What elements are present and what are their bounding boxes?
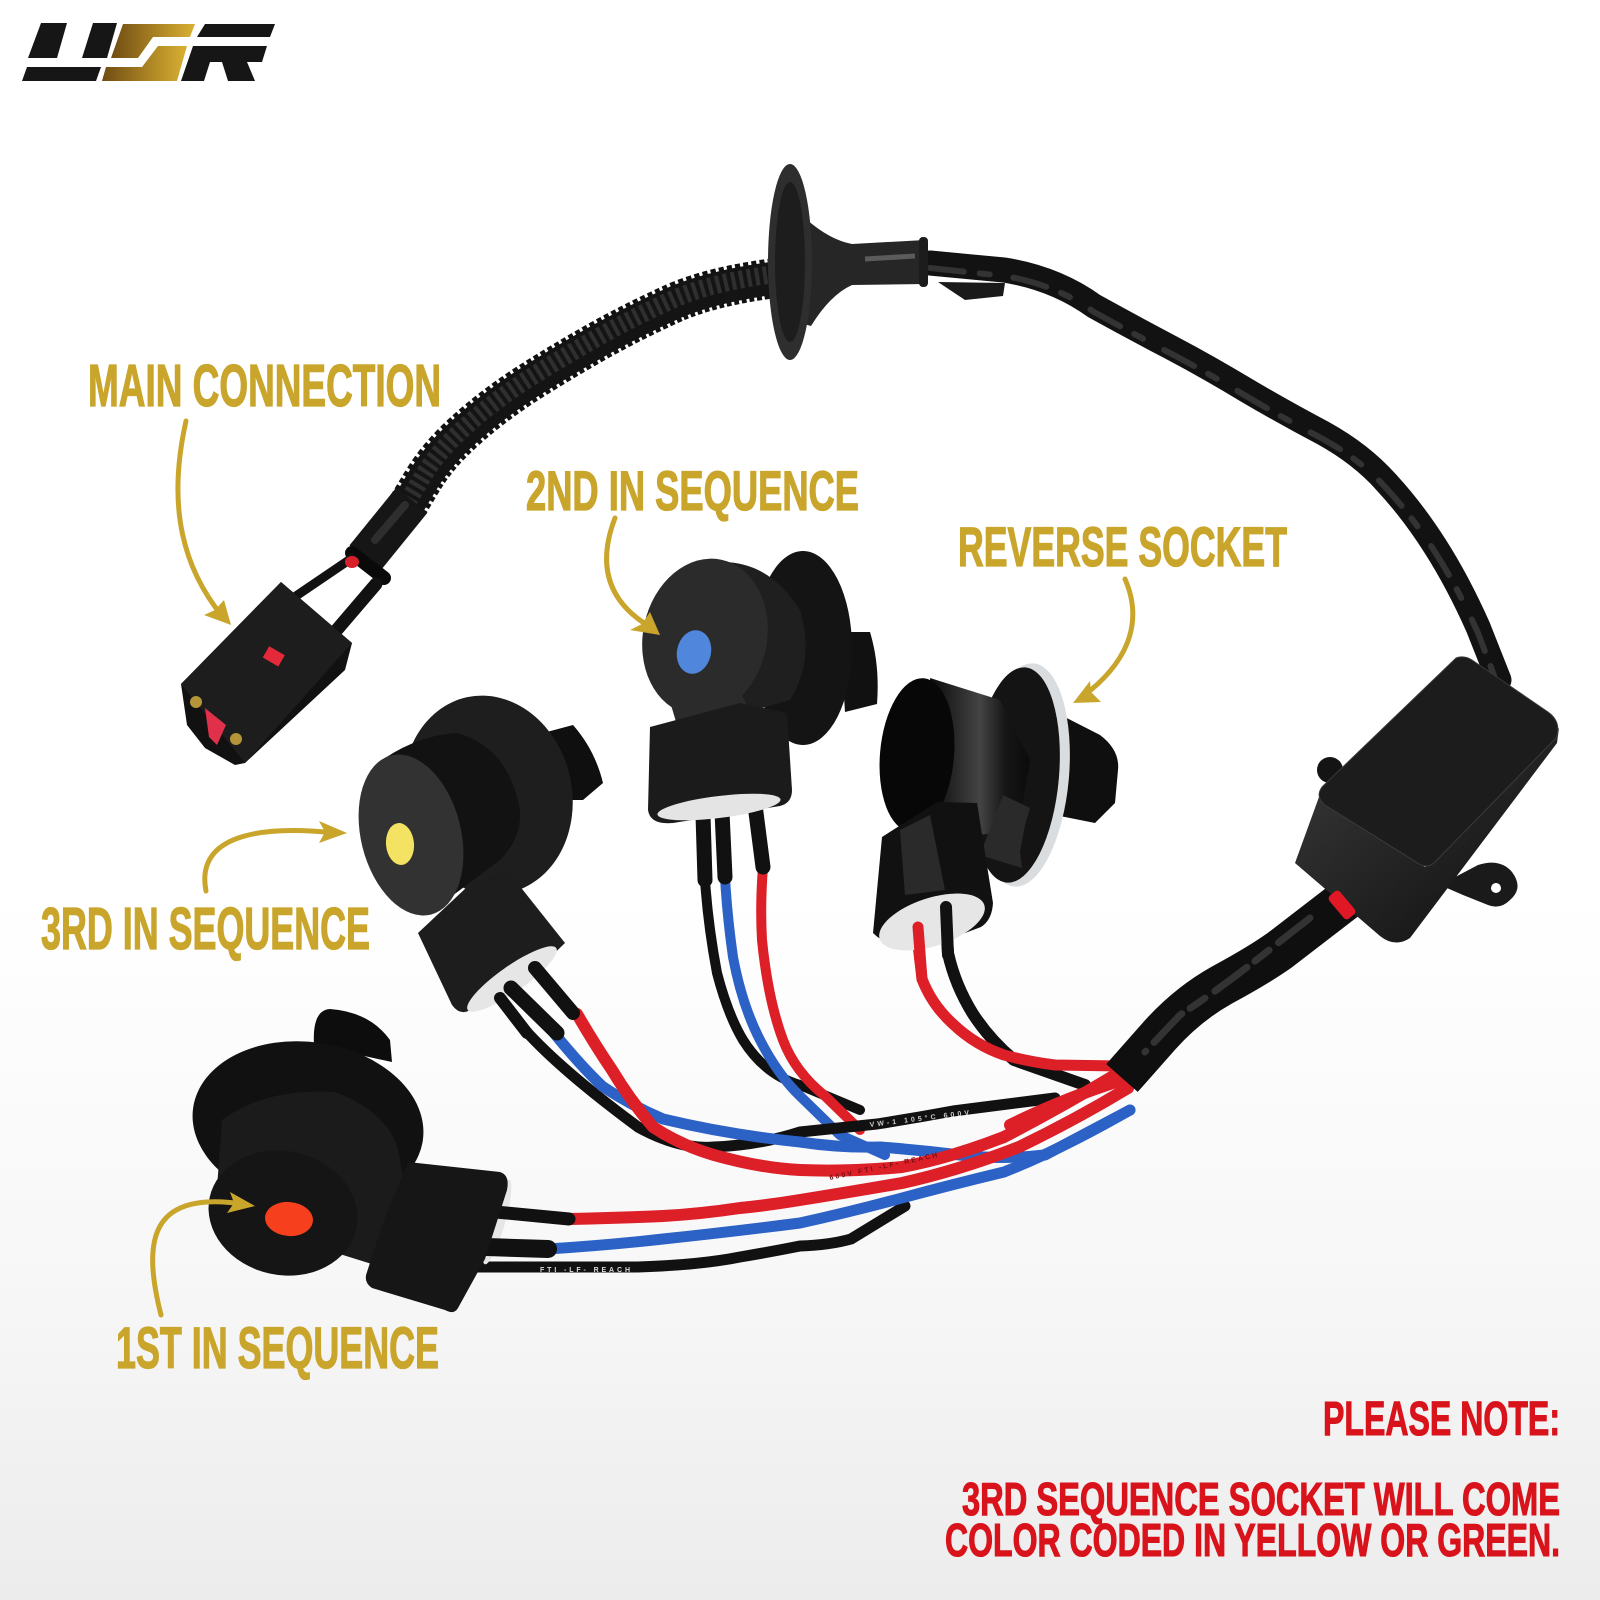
sleeves — [535, 968, 573, 1013]
red slider — [263, 646, 285, 667]
wires: bundled black, blue, red: VW-1 105°C 600V — [869, 1109, 970, 1129]
cylinder — [215, 1092, 405, 1265]
connector — [418, 870, 565, 1012]
connector — [648, 703, 792, 823]
label: reverse socket: REVERSE SOCKET — [958, 515, 1287, 578]
arrow: 3rd in sequence — [205, 821, 347, 891]
box top face — [1319, 657, 1558, 866]
white end cap — [477, 1177, 517, 1267]
wires: bundled black, blue, red: 600V FTI -LF- REACH — [829, 1152, 938, 1182]
disk — [343, 743, 479, 927]
rubber grommet — [768, 164, 928, 360]
1st in sequence socket — [182, 1009, 569, 1312]
flange — [754, 551, 852, 745]
lower taped harness — [1122, 900, 1345, 1078]
color dot: blue — [673, 627, 715, 677]
plug body — [181, 582, 352, 765]
arrow: 2nd in sequence — [607, 518, 660, 635]
label: main connection: MAIN CONNECTION — [88, 353, 441, 419]
wire print: FTI -LF- REACH — [540, 1267, 630, 1274]
cylinder — [385, 733, 520, 905]
taped harness cable to control box — [930, 263, 1499, 680]
reverse socket — [872, 660, 1118, 979]
box sides — [1295, 728, 1559, 943]
label: 1st in sequence: 1ST IN SEQUENCE — [116, 1316, 439, 1381]
2nd in sequence socket — [628, 547, 878, 825]
back nub — [840, 632, 878, 712]
disk — [628, 547, 782, 727]
logo: USR — [22, 23, 275, 81]
connector — [873, 802, 993, 948]
3rd in sequence socket — [343, 680, 603, 1033]
nub — [543, 725, 603, 800]
color dot: red — [264, 1200, 314, 1238]
arrow: reverse socket — [1073, 579, 1133, 703]
mounting ears — [1440, 863, 1518, 907]
wires: reverse socket — [916, 910, 1120, 1085]
back nub — [1055, 712, 1118, 823]
tab — [980, 795, 1030, 868]
flange — [385, 680, 591, 910]
white end cap — [872, 882, 992, 962]
open cup — [873, 675, 961, 835]
top nub — [314, 1009, 392, 1062]
seal flange — [969, 660, 1079, 890]
connector — [366, 1162, 508, 1312]
color dot: yellow — [384, 822, 416, 866]
white end cap — [656, 789, 782, 825]
label: 3rd in sequence: 3RD IN SEQUENCE — [41, 896, 370, 962]
cylinder — [930, 678, 1030, 840]
corrugated conduit to main connection — [352, 274, 775, 578]
arrow: main connection — [178, 421, 231, 625]
control box — [1295, 657, 1559, 943]
red clip — [1327, 889, 1357, 921]
flange — [182, 1027, 434, 1221]
cylinder — [720, 562, 806, 720]
plug wires — [296, 556, 376, 632]
arrow: 1st in sequence — [153, 1192, 255, 1315]
wires: 2nd socket — [703, 805, 885, 1155]
label: 2nd in sequence: 2ND IN SEQUENCE — [526, 459, 859, 522]
note: please note — [945, 1393, 1560, 1566]
main connection plug — [181, 556, 376, 765]
sleeves — [496, 1212, 569, 1219]
white end cap — [460, 937, 564, 1021]
disk — [197, 1137, 369, 1289]
wires: bundled black, blue, red — [478, 1014, 1130, 1274]
